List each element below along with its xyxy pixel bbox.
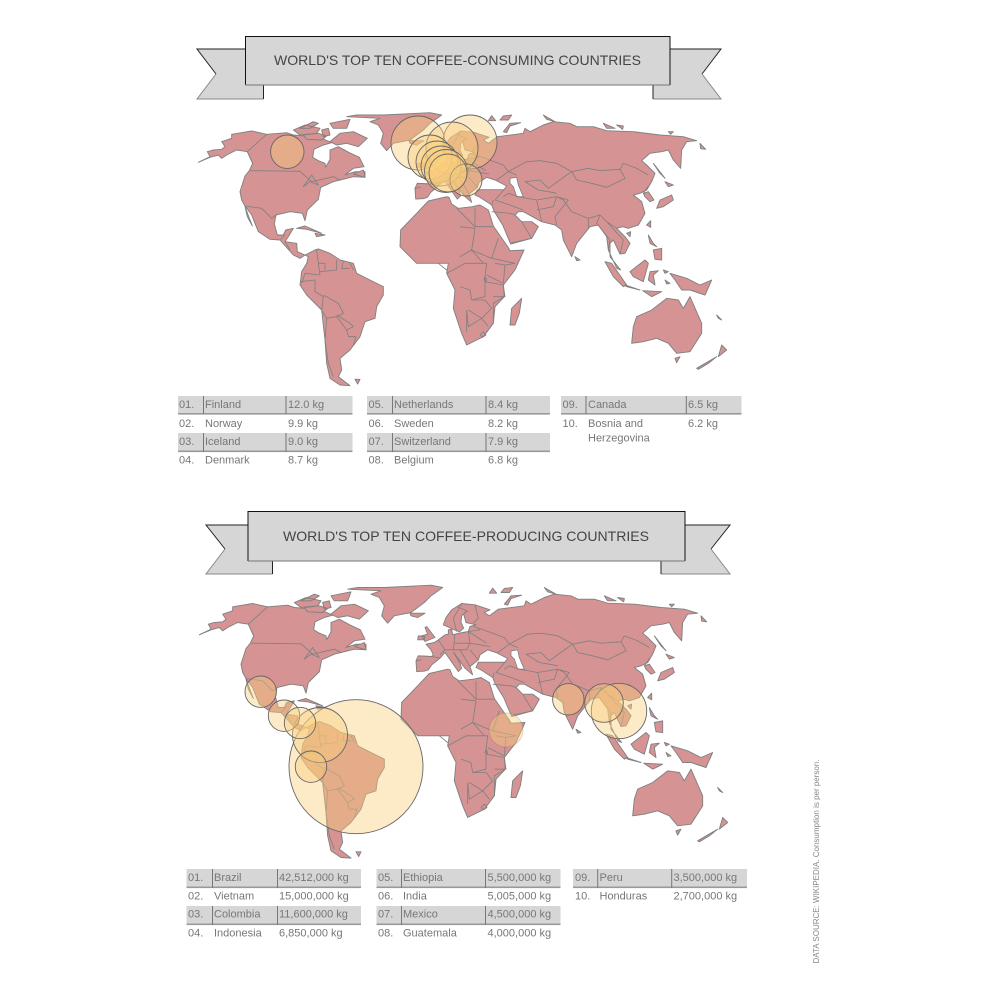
table: producing column 1: 01.: [188, 872, 203, 884]
banner: coffee-consuming: [197, 36, 721, 99]
table: consuming column 2: 07.: [368, 436, 384, 448]
table: producing column 2: 5,005,000 kg: [488, 890, 551, 902]
table: producing column 1: 15,000,000 kg: [279, 890, 349, 902]
table: producing column 3: 09.: [575, 872, 590, 884]
table: producing column 1: 03.: [188, 908, 203, 920]
bubbles: consumption per person: [271, 115, 497, 196]
table: producing column 1: Indonesia: [214, 928, 263, 940]
table: producing column 2: 07.: [378, 908, 393, 920]
table: consuming column 1: 8.7 kg: [288, 454, 318, 466]
bubbles: production volume: [245, 676, 647, 834]
table: consuming column 1: Iceland: [205, 436, 240, 448]
table: consuming column 1: [178, 396, 352, 466]
banner: coffee-producing: [206, 512, 730, 574]
table: consuming column 2: 08.: [368, 454, 384, 466]
table: producing column 2: India: [403, 890, 428, 902]
table: producing column 1: 11,600,000 kg: [279, 908, 348, 920]
table: producing column 2: 4,000,000 kg: [488, 928, 551, 940]
table: consuming column 3: 10.: [562, 418, 578, 430]
table: consuming column 2: 8.4 kg: [488, 399, 518, 411]
table: producing column 1: Vietnam: [214, 890, 254, 902]
table: consuming column 2: 6.8 kg: [488, 454, 518, 466]
table: producing column 3: 3,500,000 kg: [674, 872, 737, 884]
table: producing column 2: 06.: [378, 890, 393, 902]
table: consuming column 1: 02.: [179, 418, 194, 430]
table: producing column 1: 04.: [188, 928, 203, 940]
heading: consuming: WORLD'S TOP TEN COFFEE-CONSUMING COUNTRIES: [274, 52, 641, 68]
table: consuming column 3: 6.2 kg: [688, 418, 718, 430]
table: producing column 2: [376, 869, 560, 940]
table: producing column 2: Mexico: [403, 908, 438, 920]
table: consuming column 1: 03.: [179, 436, 194, 448]
table: producing column 1: 6,850,000 kg: [279, 928, 343, 940]
table: producing column 2: 05.: [378, 872, 393, 884]
table: consuming column 2: Netherlands: [394, 399, 454, 411]
table: consuming column 1: Norway: [205, 418, 243, 430]
table: consuming column 2: 7.9 kg: [488, 436, 518, 448]
map: producing countries: [199, 585, 728, 858]
table: producing column 1: 02.: [188, 890, 203, 902]
table: consuming column 1: 04.: [179, 454, 194, 466]
table: consuming column 2: 8.2 kg: [488, 418, 518, 430]
table: producing column 3: Honduras: [600, 890, 648, 902]
table: consuming column 1: 9.9 kg: [288, 418, 318, 430]
table: consuming column 1: 12.0 kg: [288, 399, 324, 411]
table: producing column 1: [186, 869, 361, 940]
table: consuming column 3: 6.5 kg: [688, 399, 718, 411]
table: producing column 2: Guatemala: [403, 928, 458, 940]
table: producing column 2: Ethiopia: [403, 872, 444, 884]
table: producing column 3: 2,700,000 kg: [674, 890, 737, 902]
table: producing column 3: 10.: [575, 890, 590, 902]
table: consuming column 3: Bosnia and: [588, 418, 643, 430]
table: consuming column 3: 09.: [562, 399, 578, 411]
table: consuming column 1: Finland: [205, 399, 241, 411]
table: producing column 3: Peru: [600, 872, 623, 884]
table: consuming column 1: 01.: [179, 399, 194, 411]
table: consuming column 2: Belgium: [394, 454, 434, 466]
table: producing column 1: Colombia: [214, 908, 261, 920]
table: consuming column 2: Sweden: [394, 418, 434, 430]
table: producing column 1: 42,512,000 kg: [279, 872, 349, 884]
table: producing column 2: 4,500,000 kg: [488, 908, 551, 920]
table: consuming column 1: 9.0 kg: [288, 436, 318, 448]
table: consuming column 3: [561, 396, 742, 444]
table: consuming column 2: 05.: [368, 399, 384, 411]
table: consuming column 3: Canada: [588, 399, 627, 411]
table: consuming column 2: [367, 396, 550, 466]
table: producing column 2: 08.: [378, 928, 393, 940]
table: consuming column 1: Denmark: [205, 454, 250, 466]
map: consuming countries: [198, 113, 727, 386]
table: producing column 2: 5,500,000 kg: [488, 872, 551, 884]
source note: DATA SOURCE: WIKIPEDIA. Consumption is per person.: [811, 760, 821, 964]
table: producing column 3: [573, 869, 747, 902]
table: producing column 1: Brazil: [214, 872, 242, 884]
heading: producing: WORLD'S TOP TEN COFFEE-PRODUCING COUNTRIES: [283, 528, 649, 544]
table: consuming column 3: Herzegovina: [588, 432, 651, 444]
table: consuming column 2: 06.: [368, 418, 384, 430]
table: consuming column 2: Switzerland: [394, 436, 451, 448]
